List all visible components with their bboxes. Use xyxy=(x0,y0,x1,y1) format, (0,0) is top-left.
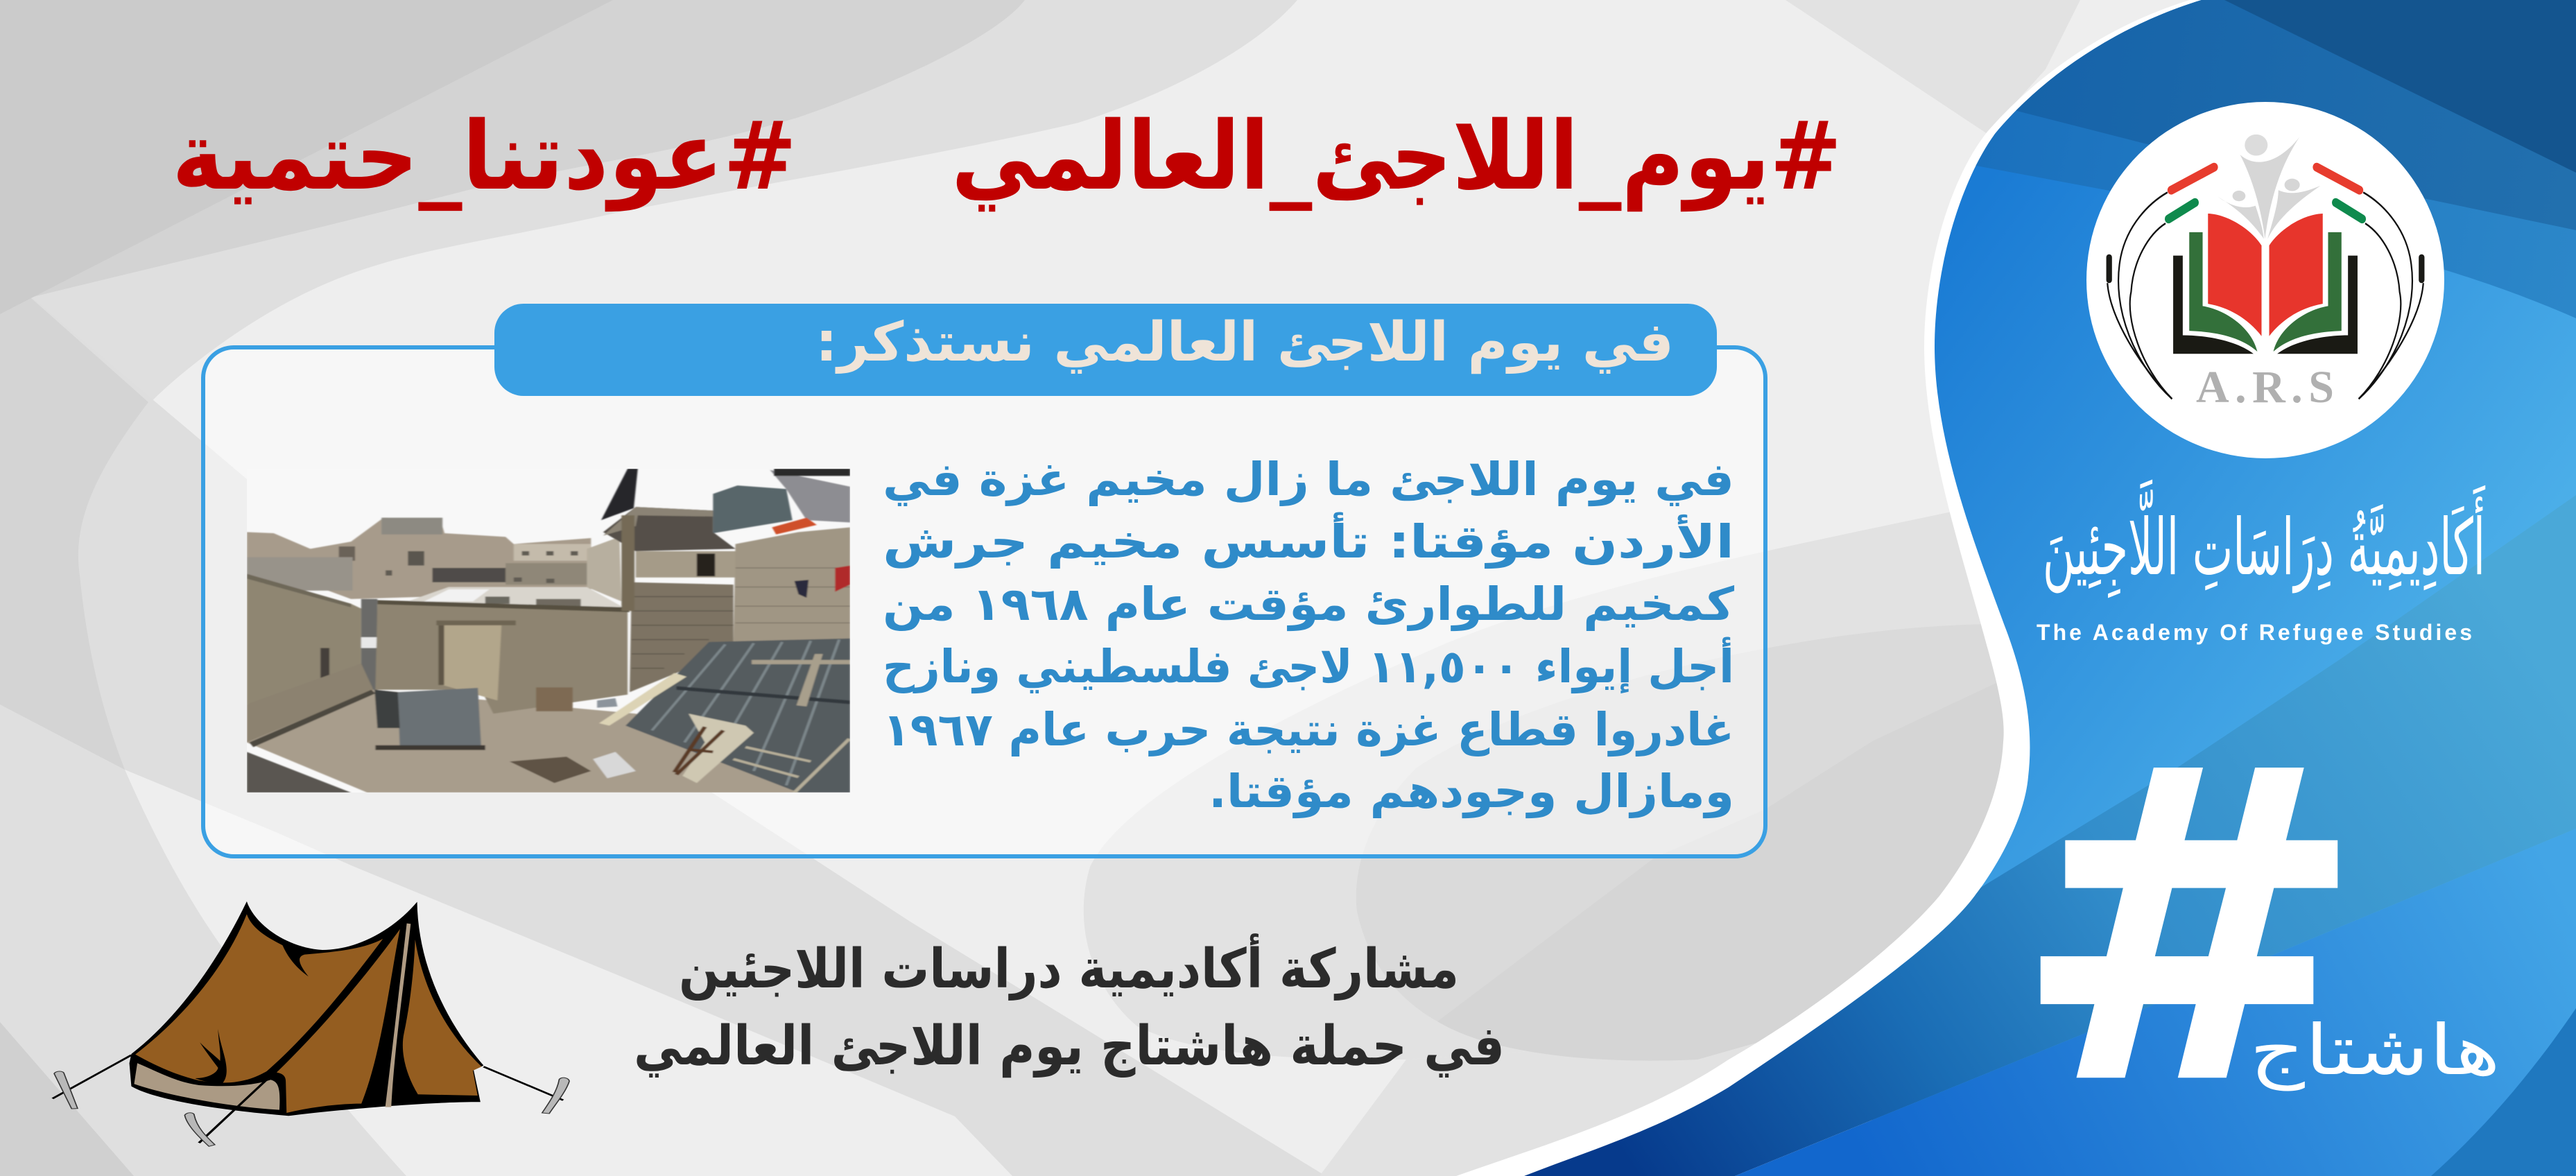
footer text: academy participation: في حملة هاشتاج يوم اللاجئ العالمي xyxy=(634,1015,1505,1078)
body text: غادروا قطاع غزة نتيجة حرب عام ١٩٦٧ xyxy=(883,703,1734,757)
badge: card heading xyxy=(494,304,1717,396)
body text: الأردن مؤقتا: تأسس مخيم جرش xyxy=(883,512,1734,569)
emblem: left reeds and left book pages xyxy=(2107,167,2261,399)
logo: A.R.S academy emblem: A.R.S xyxy=(2196,362,2334,413)
footer text: academy participation xyxy=(634,933,1505,1078)
footer text: academy participation: مشاركة أكاديمية دراسات اللاجئين xyxy=(679,933,1459,1001)
heading: world refugee day hashtag: #يوم_اللاجئ_العالمي xyxy=(951,102,1842,211)
panel: blue sidebar background xyxy=(1524,0,2576,1176)
label: hashtag word: هاشتاج xyxy=(2249,1010,2500,1091)
heading: our return is inevitable hashtag: #عودتنا_حتمية xyxy=(172,102,797,211)
white curved band xyxy=(1456,0,2576,1176)
logo: A.R.S academy emblem xyxy=(2086,102,2444,458)
badge: card heading: في يوم اللاجئ العالمي نستذكر: xyxy=(815,311,1674,374)
photo: refugee camp xyxy=(247,469,850,793)
caption: academy name in English: The Academy Of Refugee Studies xyxy=(2037,620,2472,645)
icon: tent xyxy=(53,901,569,1146)
body text: ومازال وجودهم مؤقتا. xyxy=(1209,765,1734,819)
icon: large hash symbol xyxy=(2041,768,2337,1078)
body text xyxy=(883,453,1735,819)
body text: أجل إيواء ١١,٥٠٠ لاجئ فلسطيني ونازح xyxy=(883,637,1734,694)
body text: كمخيم للطوارئ مؤقت عام ١٩٦٨ من xyxy=(883,578,1735,632)
panel: main content card xyxy=(203,304,1765,856)
body text: في يوم اللاجئ ما زال مخيم غزة في xyxy=(883,453,1734,507)
